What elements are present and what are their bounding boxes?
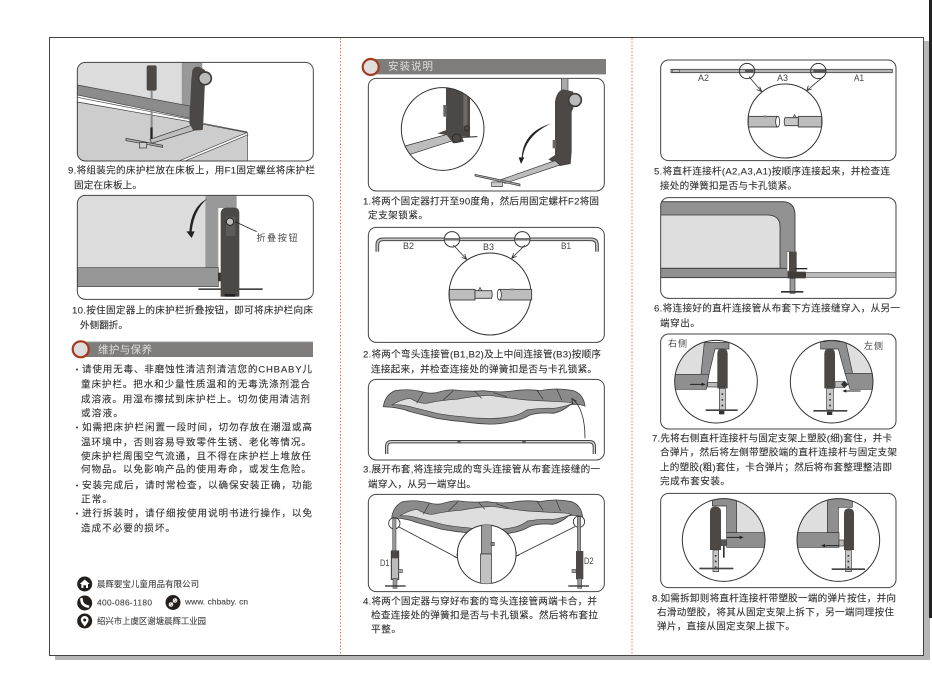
icon: home — [77, 576, 92, 592]
text block: maintenance notes: 请使用无毒、非磨蚀性清洁剂清洁您的CHBABY儿 — [82, 364, 312, 376]
pipe labels B1 B2 B3: B1 — [561, 241, 571, 251]
inset: bracket detail — [401, 87, 484, 170]
panel: step 3 illustration — [368, 379, 604, 460]
bracket labels D1 D2: D2 — [584, 556, 594, 566]
icon: phone — [77, 596, 92, 610]
panel: step 1 illustration — [368, 78, 604, 191]
step 2 text: 连接起来，并检查连接处的弹簧扣是否与卡孔锁紧。 — [371, 364, 597, 376]
pipe labels A1 A2 A3 — [698, 73, 864, 83]
side labels — [668, 338, 883, 351]
step 3 text: 3.展开布套,将连接完成的弯头连接管从布套连接缝的一 — [363, 464, 600, 476]
step 5 text: 5.将直杆连接杆(A2,A3,A1)按顺序连接起来，并检查连 — [654, 166, 890, 178]
text block: maintenance notes: 造成不必要的损坏。 — [81, 522, 175, 534]
step 9 text: 9.将组装完的床护栏放在床板上，用F1固定螺丝将床护栏 — [68, 164, 315, 176]
panel: step 7 illustration — [661, 334, 896, 429]
inset: release left — [795, 497, 880, 581]
step 10 text — [72, 304, 313, 332]
step 1 text: 定支架锁紧。 — [368, 210, 428, 222]
bracket labels D1 D2: D1 — [380, 558, 390, 568]
pipe labels A1 A2 A3: A2 — [698, 73, 709, 83]
panel: step 9 illustration — [77, 62, 313, 162]
panel: step 6 illustration — [658, 198, 899, 298]
step 4 text — [363, 596, 598, 636]
pipe labels B1 B2 B3: B3 — [483, 242, 494, 252]
inset: left side — [790, 337, 875, 423]
panel: step 5 illustration — [661, 60, 896, 161]
fabric cover — [392, 500, 583, 535]
footer: company contacts: 晨辉婴宝儿童用品有限公司 — [97, 579, 199, 589]
icon: link — [166, 595, 180, 610]
step 6 text — [654, 302, 900, 330]
step 1 text: 1.将两个固定器打开至90度角，然后用固定螺杆F2将固 — [363, 196, 599, 208]
text block: maintenance notes: 使床护栏周围空气流通，且不得在床护栏上堆放任 — [81, 450, 311, 462]
step 4 text: 平整。 — [371, 624, 401, 636]
pipe labels A1 A2 A3: A1 — [854, 73, 864, 83]
footer: company contacts: 400-086-1180 — [97, 598, 152, 608]
step 1 text — [363, 196, 599, 222]
step 7 text: 7.先将右侧直杆连接杆与固定支架上塑胶(细)套住，并卡 — [652, 432, 892, 444]
pipe labels B1 B2 B3 — [403, 241, 571, 252]
step 7 text — [652, 432, 897, 488]
inset: right side — [672, 337, 757, 423]
side labels: 右侧 — [668, 338, 687, 348]
panel: step 8 illustration — [661, 493, 896, 588]
step 5 text — [654, 166, 890, 192]
panel: step 10 illustration — [77, 195, 313, 299]
icon: location — [77, 614, 92, 628]
step 9 text: 固定在床板上。 — [74, 180, 142, 192]
footer: company contacts: 绍兴市上虞区谢塘晨辉工业园 — [97, 616, 206, 626]
heading: maintenance: 维护与保养 — [98, 343, 152, 356]
step 6 text: 6.将连接好的直杆连接管从布套下方连接缝穿入，从另一 — [654, 302, 900, 314]
step 8 text: 8.如需拆卸则将直杆连接杆带塑胶一端的弹片按住，并向 — [652, 592, 896, 604]
footer: company contacts — [77, 576, 248, 628]
text block: maintenance notes: 温环境中，否则容易导致零件生锈、老化等情况。 — [81, 436, 311, 448]
pipe labels A1 A2 A3: A3 — [777, 73, 788, 83]
inset: release right — [682, 497, 767, 581]
step 5 text: 接处的弹簧扣是否与卡孔锁紧。 — [660, 180, 797, 192]
step 9 text — [68, 164, 315, 192]
text block: maintenance notes: 何物品。以免影响产品的使用寿命，或发生危险。 — [81, 464, 311, 476]
panel: step 2 illustration — [368, 227, 604, 342]
step 3 text — [363, 464, 600, 490]
panel: step 4 illustration — [368, 494, 604, 592]
heading: installation: 安装说明 — [388, 60, 433, 72]
step 7 text: 合弹片，然后将左侧带塑胶端的直杆连接杆与固定支架 — [660, 446, 897, 458]
bracket labels D1 D2 — [380, 556, 594, 568]
step 4 text: 4.将两个固定器与穿好布套的弯头连接管两端卡合，并 — [363, 596, 597, 608]
label: folding button: 折叠按钮 — [256, 232, 298, 243]
heading: installation — [363, 59, 606, 75]
text block: maintenance notes: 安装完成后，请时常检查，以确保安装正确，功能 — [82, 480, 312, 492]
step 2 text: 2.将两个弯头连接管(B1,B2)及上中间连接管(B3)按顺序 — [363, 348, 601, 360]
step 6 text: 端穿出。 — [660, 318, 700, 330]
text block: maintenance notes: 进行拆装时，请仔细按使用说明书进行操作，以免 — [82, 508, 312, 520]
text block: maintenance notes: 或溶液。 — [81, 408, 123, 420]
pipe labels B1 B2 B3: B2 — [403, 241, 414, 251]
step 8 text — [652, 592, 896, 632]
text block: maintenance notes: 童床护栏。把水和少量性质温和的无毒洗涤剂混合 — [81, 378, 310, 390]
footer: company contacts: www. chbaby. cn — [184, 596, 248, 606]
text block: maintenance notes: 正常。 — [81, 494, 112, 506]
step 7 text: 完成布套安装。 — [660, 476, 730, 488]
text block: maintenance notes — [76, 364, 312, 534]
step 10 text: 10.按住固定器上的床护栏折叠按钮，即可将床护栏向床 — [72, 304, 313, 316]
side labels: 左侧 — [864, 340, 883, 351]
step 10 text: 外侧翻折。 — [80, 320, 128, 332]
step 8 text: 弹片，直接从固定支架上拔下。 — [657, 620, 795, 632]
step 2 text — [363, 348, 601, 376]
text block: maintenance notes: 如需把床护栏闲置一段时间，切勿存放在潮湿或高 — [82, 422, 312, 434]
heading: maintenance — [73, 341, 313, 357]
fabric cover — [383, 389, 585, 424]
step 8 text: 右滑动塑胶，将其从固定支架上拆下，另一端同理按住 — [657, 606, 894, 618]
step 4 text: 检查连接处的弹簧扣是否与卡孔锁紧。然后将布套拉 — [371, 610, 598, 622]
step 3 text: 端穿入，从另一端穿出。 — [368, 478, 476, 490]
step 7 text: 上的塑胶(粗)套住，卡合弹片；然后将布套整理整洁即 — [660, 462, 892, 474]
text block: maintenance notes: 成溶液。用湿布擦拭到床护栏上。切勿使用清洁剂 — [81, 394, 310, 406]
